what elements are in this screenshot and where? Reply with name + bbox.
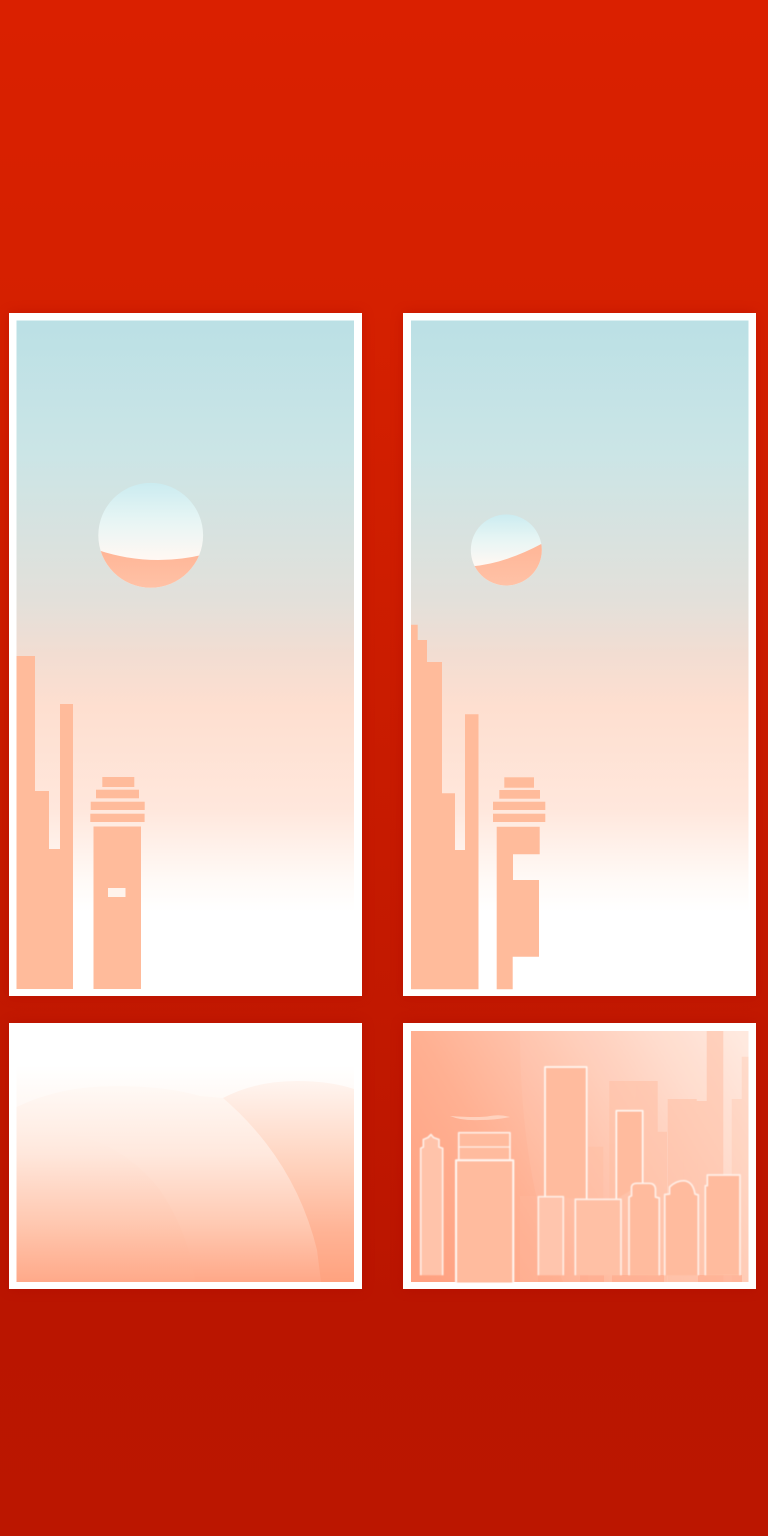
- buildings: stepped skyline right: [411, 625, 478, 989]
- icon: sun with peach lower part: [98, 483, 203, 588]
- panel shadows: [9, 313, 756, 1289]
- panel: sky with round sun, top left: [9, 313, 362, 996]
- cloud wisp: [450, 1115, 510, 1120]
- distant building silhouettes: [520, 1031, 748, 1282]
- panel: dunes, bottom left: [9, 1023, 362, 1289]
- soft inner dune: [16, 1130, 195, 1282]
- outlined buildings: [421, 1067, 740, 1282]
- bottom ground patches: [580, 1275, 742, 1282]
- near dune left: [16, 1086, 321, 1282]
- far dune right: [223, 1081, 354, 1282]
- tower with cut-out profile: [493, 777, 545, 989]
- icon: small sun with slanted peach part: [470, 514, 542, 586]
- panel: city skyline, bottom right: [403, 1023, 756, 1289]
- light curved sweep: [520, 1031, 748, 1282]
- panel: sky with small sun, top right: [403, 313, 756, 996]
- buildings: stepped skyline left: [16, 656, 73, 989]
- tower with banded top and window: [90, 777, 145, 989]
